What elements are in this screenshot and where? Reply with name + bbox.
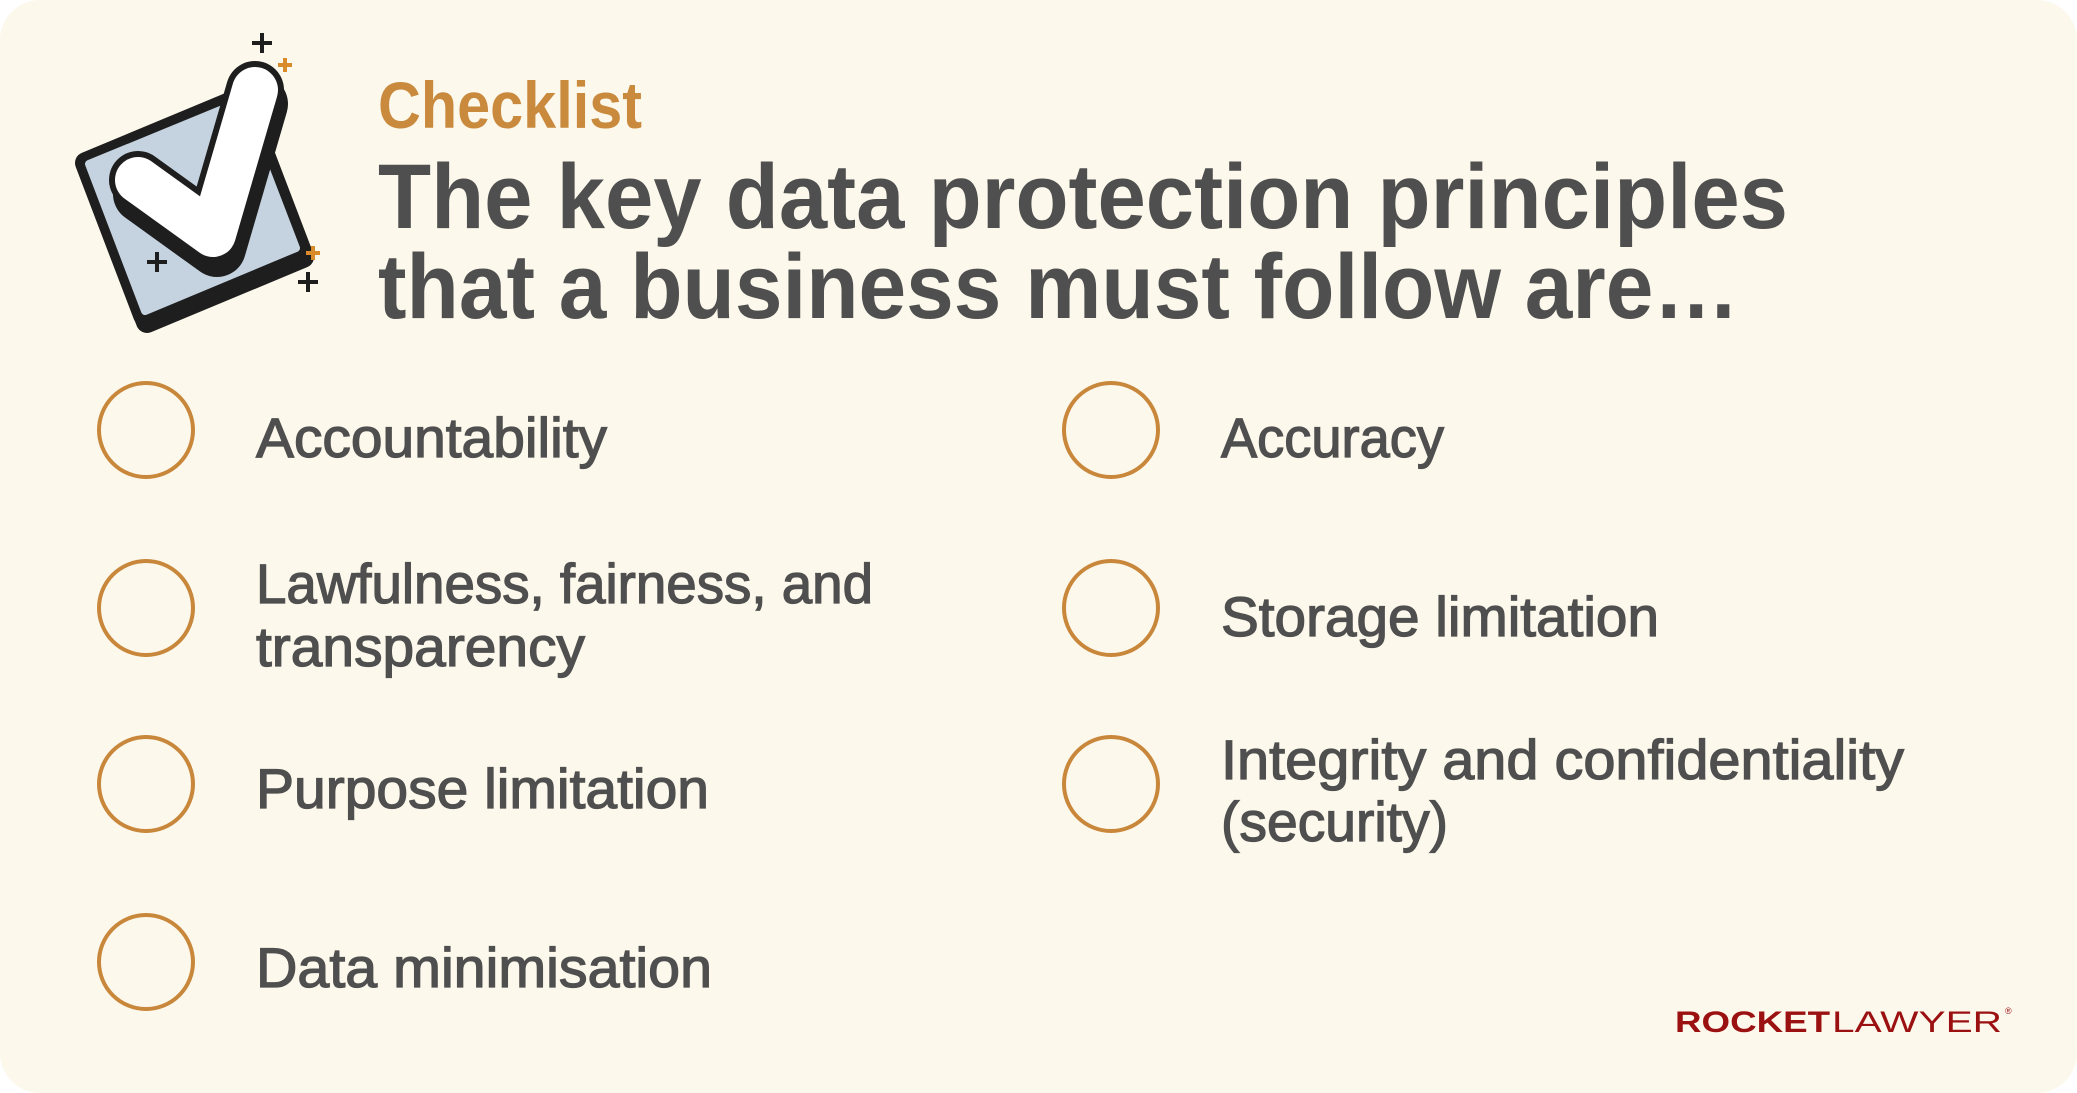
item: Accuracy: Accuracy: [1221, 406, 1444, 469]
item: Accountability: [99, 383, 607, 477]
item: Accountability: Accountability: [256, 406, 607, 469]
icon: checkbox with checkmark: [86, 33, 320, 322]
item: Accuracy: [1064, 383, 1444, 477]
logo: Rocket Lawyer: ROCKET: [1675, 1006, 1830, 1039]
item: Lawfulness: transparency: [256, 615, 585, 678]
item: Purpose limitation: Purpose limitation: [256, 757, 709, 820]
title: The key data protection principles: [378, 146, 1788, 248]
item: Storage limitation: [1064, 561, 1659, 655]
logo: Rocket Lawyer: [1675, 1006, 2012, 1039]
item: Integrity: (security): [1221, 790, 1448, 853]
item: Integrity: [1064, 728, 1904, 853]
item: Lawfulness: [99, 552, 873, 678]
item: Purpose limitation: [99, 737, 709, 831]
item: Lawfulness: Lawfulness, fairness, and: [256, 552, 873, 615]
checklist items: [99, 383, 1904, 1009]
title: that a business must follow are…: [378, 236, 1739, 338]
item: Storage limitation: Storage limitation: [1221, 585, 1659, 648]
subtitle: Checklist: Checklist: [378, 68, 642, 142]
title: [378, 146, 1788, 338]
logo: Rocket Lawyer: ®: [2005, 1006, 2012, 1016]
logo: Rocket Lawyer: LAWYER: [1832, 1006, 2002, 1039]
item: Integrity: Integrity and confidentiality: [1221, 728, 1904, 791]
item: Data minimisation: Data minimisation: [256, 936, 712, 999]
item: Data minimisation: [99, 915, 712, 1009]
